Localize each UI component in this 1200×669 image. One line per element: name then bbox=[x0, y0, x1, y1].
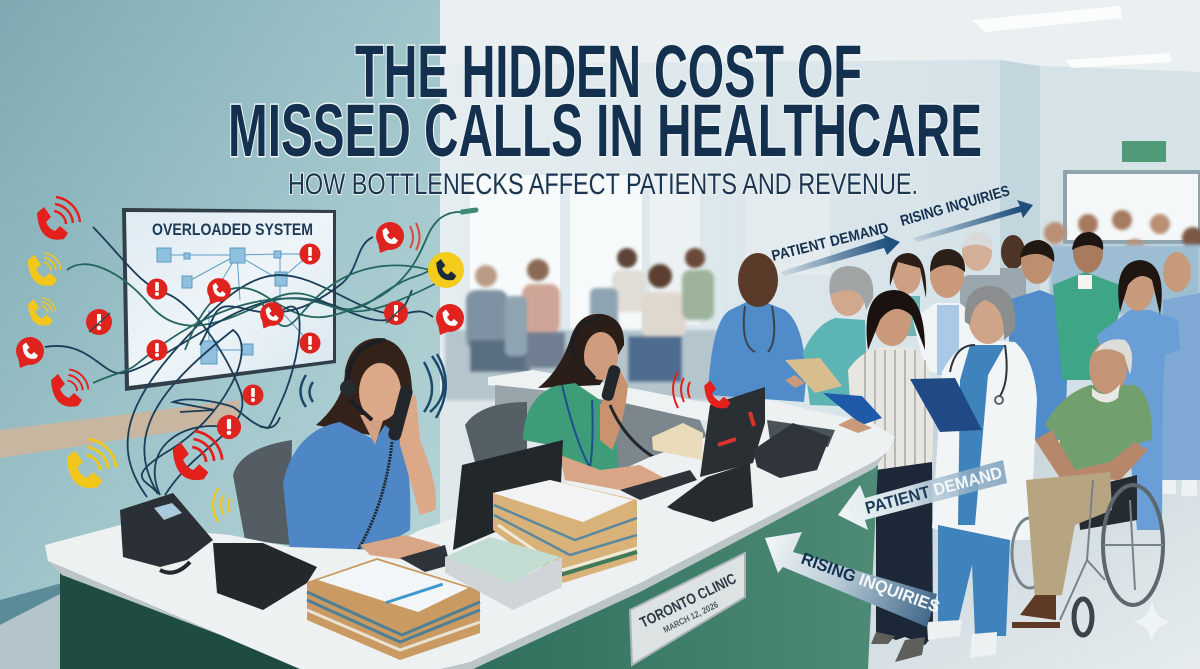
far right nurse bbox=[1158, 252, 1200, 496]
toronto clinic sign bbox=[630, 553, 745, 665]
desk phone right bbox=[753, 423, 830, 478]
chair bbox=[465, 402, 527, 462]
nurse far bbox=[890, 253, 926, 336]
dark recess behind phone bbox=[767, 420, 835, 447]
front reception desk bbox=[45, 400, 895, 669]
hair bbox=[316, 338, 412, 440]
missed call icons bbox=[16, 197, 464, 527]
background crowd bbox=[1044, 210, 1200, 315]
icon: red bubble phone right bbox=[376, 222, 404, 253]
arrow: rising inquiries lower: RISING INQUIRIES bbox=[799, 549, 942, 617]
icon: yellow phone bbox=[28, 253, 61, 286]
title: THE HIDDEN COST OF bbox=[355, 30, 862, 113]
desk front green panel bbox=[473, 465, 878, 669]
nurse dark scrubs man bbox=[708, 253, 806, 402]
woman in striped shirt bbox=[848, 290, 934, 662]
icon: sound waves bbox=[300, 354, 446, 418]
nurse male blue bbox=[1008, 240, 1083, 440]
far wheel bbox=[1012, 518, 1048, 588]
counter edge bbox=[48, 440, 895, 669]
desk phone front bbox=[213, 543, 317, 610]
red phone on laptop bbox=[704, 381, 731, 408]
icon: yellow phone near desk bbox=[243, 478, 292, 527]
keyboard right bbox=[620, 470, 697, 500]
icon: red phone bbox=[51, 369, 88, 407]
desk items bbox=[120, 372, 830, 660]
laptop bbox=[700, 387, 765, 477]
wheel bbox=[1103, 485, 1163, 605]
phone bbox=[601, 364, 621, 402]
toronto clinic sign: TORONTO CLINIC bbox=[637, 570, 739, 632]
teal folders bbox=[445, 537, 562, 610]
icon: yellow circle phone bbox=[428, 252, 464, 288]
arrow: rising inquiries upper: RISING INQUIRIES bbox=[898, 182, 1012, 230]
arrow: rising inquiries lower bbox=[765, 532, 942, 627]
background waiting patients bbox=[445, 248, 735, 400]
young man bbox=[1000, 235, 1026, 298]
desk front dark panel bbox=[60, 565, 315, 669]
phone bbox=[387, 384, 414, 442]
neck bbox=[360, 415, 385, 445]
older man bbox=[960, 233, 1022, 330]
face bbox=[359, 363, 401, 421]
red waves by laptop bbox=[673, 372, 690, 408]
nurse green bbox=[1053, 231, 1120, 380]
subtitle: HOW BOTTLENECKS AFFECT PATIENTS AND REVENUE. bbox=[288, 168, 918, 201]
receptionist forearms on desk bbox=[360, 455, 668, 560]
network diagram nodes bbox=[157, 248, 310, 364]
nurse blue right bbox=[1097, 260, 1180, 530]
clipboards held over counter bbox=[785, 358, 882, 433]
arm raised bbox=[398, 395, 436, 515]
coiled cord bbox=[610, 405, 700, 473]
tangled cables bbox=[45, 210, 476, 497]
icon: red phone top left bbox=[37, 197, 80, 240]
countertop bbox=[45, 400, 895, 669]
monitor heading: OVERLOADED SYSTEM bbox=[152, 220, 313, 239]
icon: yellow waves left of desk phone bbox=[213, 488, 230, 522]
man in wheelchair bbox=[1012, 339, 1163, 635]
large paper stack bbox=[493, 480, 637, 583]
title bbox=[228, 30, 982, 172]
icon: yellow phone small bbox=[28, 298, 56, 326]
torso bbox=[1045, 385, 1152, 475]
icon: red circle slashed right bbox=[384, 301, 408, 325]
icon: alert badges bbox=[146, 244, 320, 439]
arm raised bbox=[600, 370, 628, 450]
icon: phone bubbles on monitor bbox=[207, 278, 284, 406]
shoe and footrest bbox=[1012, 595, 1060, 628]
arm bbox=[1035, 430, 1148, 480]
wall monitor: overloaded system bbox=[122, 208, 336, 391]
icon: red bubble phone left bbox=[16, 337, 44, 368]
arrow: patient demand upper: PATIENT DEMAND bbox=[770, 219, 891, 265]
hair bbox=[538, 314, 624, 388]
torso bbox=[283, 422, 410, 552]
icon: red bubble phone lower right bbox=[436, 304, 464, 335]
papers behind laptop bbox=[652, 423, 703, 460]
older doctor in white coat bbox=[910, 286, 1037, 658]
back desk counter bbox=[488, 370, 770, 470]
sparkle mark bbox=[1132, 600, 1172, 642]
torso bbox=[523, 383, 618, 480]
desk phone centre bbox=[667, 463, 753, 522]
receptionist left bbox=[233, 338, 436, 563]
icon: red circle alert slashed bbox=[86, 309, 112, 335]
icon: large yellow phone bbox=[67, 439, 116, 488]
legs bbox=[1026, 472, 1112, 598]
face bbox=[584, 332, 618, 380]
headset bbox=[347, 340, 385, 420]
seat bbox=[1077, 475, 1137, 530]
lanyard bbox=[562, 385, 593, 468]
arrow: patient demand lower bbox=[838, 460, 1007, 530]
icon: large red phone bbox=[173, 431, 222, 480]
keyboard left bbox=[400, 545, 450, 572]
nurse teal older bbox=[803, 266, 873, 407]
arrow: patient demand lower: PATIENT DEMAND bbox=[863, 463, 1004, 518]
queue of staff and patients bbox=[708, 210, 1200, 662]
coiled cord bbox=[350, 442, 392, 563]
desktop monitor bbox=[453, 440, 563, 550]
front paper stack bbox=[307, 558, 480, 660]
chair bbox=[233, 440, 292, 545]
doctor white coat back bbox=[913, 249, 985, 380]
desk phone left bbox=[120, 493, 213, 573]
icon: red waves beside bubble bbox=[410, 223, 420, 250]
receptionist right bbox=[465, 314, 700, 480]
head bbox=[1089, 342, 1127, 394]
toronto clinic sign: MARCH 12, 2026 bbox=[661, 600, 720, 635]
headset bbox=[572, 318, 600, 378]
